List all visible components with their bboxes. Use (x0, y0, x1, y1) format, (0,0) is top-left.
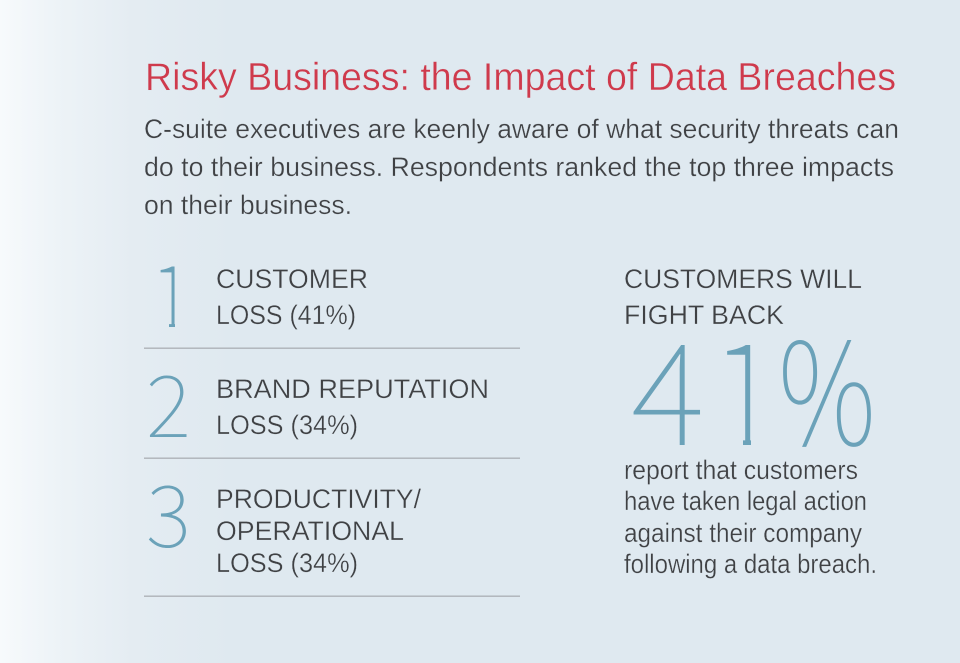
intro text block (144, 114, 899, 220)
callout description (624, 455, 877, 579)
callout heading: CUSTOMERS WILL (624, 264, 862, 294)
ranked list panel (144, 266, 520, 597)
callout: customers will fight back (624, 264, 877, 579)
callout description: against their company (624, 518, 862, 548)
rank 2: brand reputation loss (146, 337, 489, 462)
rank 1: customer loss: 1 (149, 227, 194, 352)
rank 1: customer loss: CUSTOMER (216, 264, 368, 294)
intro text block: on their business. (144, 190, 352, 220)
rank 3: productivity/operational loss: 3 (146, 447, 191, 572)
big statistic 41%: 1 (708, 280, 782, 486)
big statistic 41%: % (778, 280, 876, 486)
callout description: following a data breach. (624, 549, 877, 579)
intro text block: C-suite executives are keenly aware of what security threats can (144, 114, 899, 144)
rank 3: productivity/operational loss: PRODUCTIVITY/ (216, 484, 421, 514)
rank 2: brand reputation loss: LOSS (34%) (216, 410, 358, 440)
rank 3: productivity/operational loss: LOSS (34%) (216, 548, 358, 578)
intro text block: do to their business. Respondents ranked the top three impacts (144, 152, 894, 182)
rank 1: customer loss: LOSS (41%) (216, 300, 356, 330)
rank 3: productivity/operational loss: OPERATIONAL (216, 516, 404, 546)
callout heading: FIGHT BACK (624, 300, 784, 330)
callout description: report that customers (624, 455, 858, 485)
callout heading (624, 264, 862, 330)
rank 3: productivity/operational loss (146, 447, 421, 578)
title: Risky Business: the Impact of Data Breaches (145, 56, 896, 99)
big statistic 41% (634, 340, 871, 447)
big statistic 41%: 4 (631, 280, 705, 486)
rank 2: brand reputation loss: BRAND REPUTATION (216, 374, 489, 404)
rank 2: brand reputation loss: 2 (146, 337, 191, 462)
rank 1: customer loss (160, 266, 367, 330)
callout description: have taken legal action (624, 486, 867, 516)
